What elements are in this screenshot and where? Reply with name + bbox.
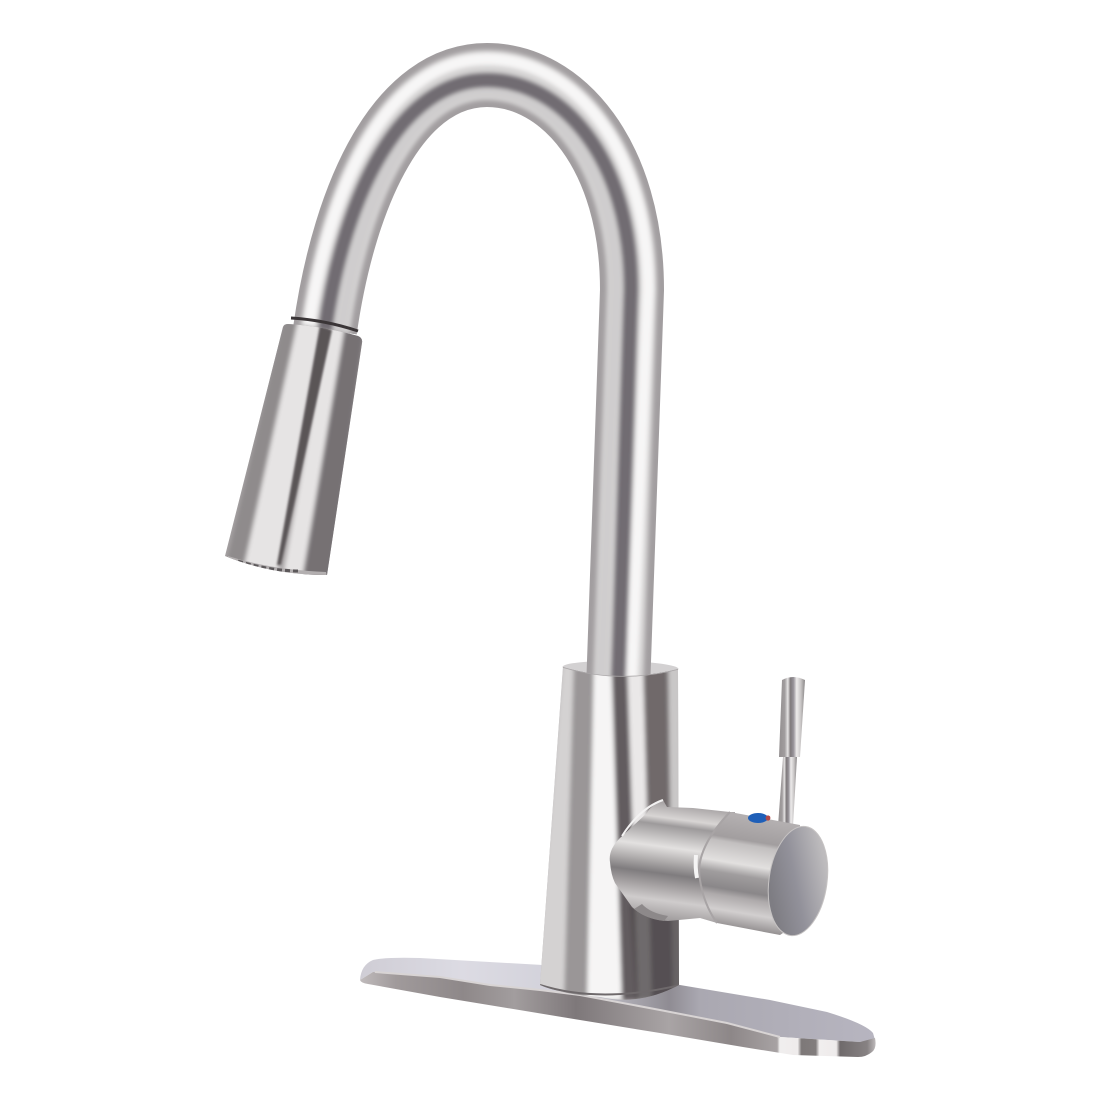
collar groove [699,812,730,923]
base foot shadow [540,985,680,994]
deck plate [360,958,876,1057]
spray head [225,324,362,575]
spray nozzle face [228,556,326,575]
illustration: brushed nickel pull-down kitchen faucet [225,43,876,1057]
handle lever [778,677,805,826]
lever stem [778,757,797,826]
gooseneck spout tube [309,59,648,690]
spray head dark stripe [277,326,332,565]
handle housing [610,799,828,936]
lever grip [779,677,805,757]
housing cylinder [610,800,735,922]
plate highlight line [375,972,780,1037]
plate top surface [360,958,875,1042]
handle end face [762,822,834,940]
mounting base body [540,667,679,1000]
spray head ring [291,318,358,331]
base rim [563,667,678,676]
plate front edge [360,972,876,1057]
handle cap [700,813,800,935]
housing notch highlight [622,800,663,836]
housing under lip [634,904,668,921]
temperature dot [748,813,770,823]
base top ring [562,660,679,676]
